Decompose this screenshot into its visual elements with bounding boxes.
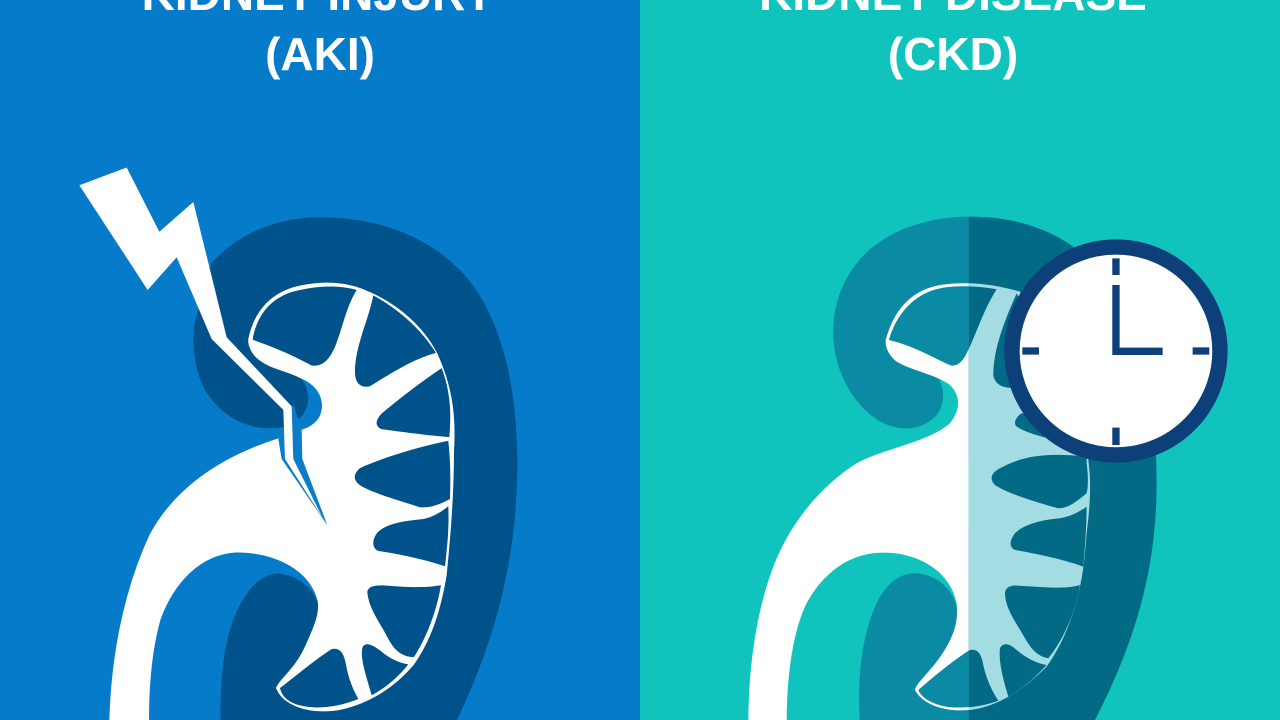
kidney inner white tissue and ureter: [110, 283, 454, 720]
heading: acute kidney injury: [142, 0, 494, 80]
icon: lightning bolt: [79, 167, 323, 518]
heading: chronic kidney disease: (CKD): [888, 28, 1018, 80]
panel: chronic kidney disease: [748, 0, 1228, 720]
illustration: injured kidney: [79, 167, 517, 720]
panel: acute kidney injury: [0, 0, 640, 720]
crack in kidney: [278, 404, 327, 525]
kidney outer body: [193, 217, 517, 720]
kidney pyramids: [253, 287, 450, 707]
kidney inner tissue and ureter: [748, 283, 1107, 720]
illustration: aging kidney: [748, 217, 1220, 720]
icon: clock: [1012, 247, 1220, 455]
kidney outer body: [833, 217, 1157, 720]
heading: acute kidney injury: (AKI): [265, 28, 375, 80]
kidney pyramids: [889, 286, 1088, 708]
heading: chronic kidney disease: [759, 0, 1147, 80]
hilum crescent: [298, 375, 325, 433]
